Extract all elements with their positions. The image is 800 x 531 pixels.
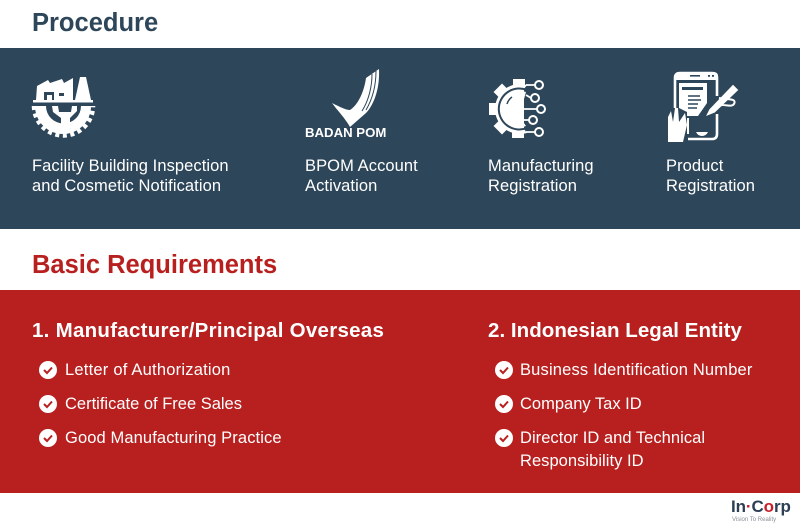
logo: InCorp [731,497,791,523]
icon: tablet with pen and hand [668,72,738,142]
item: certificate of free sales: Certificate of Free Sales [65,395,242,413]
item: letter of authorization: Letter of Authorization [65,361,231,379]
text: tagline: Vision To Reality [732,517,776,523]
item: good manufacturing practice: Good Manufacturing Practice [65,429,282,447]
item: director and technical responsibility id [495,429,705,470]
text: step 4: Product [666,157,723,175]
panel: requirements [0,290,800,493]
text: InCorp wordmark: In·Corp [731,497,791,516]
item: director and technical responsibility id: Responsibility ID [520,452,644,470]
text: step 2 [305,157,418,195]
text: step 1: Facility Building Inspection [32,157,229,175]
text: step 1: and Cosmetic Notification [32,177,221,195]
icon: Badan POM logo [332,69,380,127]
text: step 4 [666,157,755,195]
icon: digital gear [489,79,546,138]
item: business identification number: Business Identification Number [520,361,753,379]
heading: manufacturer: 1. Manufacturer/Principal Overseas [32,319,384,342]
text: step 2: Activation [305,177,377,195]
text: step 3: Manufacturing [488,157,594,175]
heading: Procedure: Procedure [32,9,158,37]
text: Badan POM wordmark: BADAN POM [305,125,386,140]
text: step 4: Registration [666,177,755,195]
icon: factory gear [32,77,96,138]
text: step 3 [488,157,594,195]
item: company tax id: Company Tax ID [520,395,642,413]
item: director and technical responsibility id: Director ID and Technical [520,429,705,447]
checklist: manufacturer [39,361,282,447]
text: step 3: Registration [488,177,577,195]
text: step 2: BPOM Account [305,157,418,175]
checklist: legal entity [495,361,753,470]
panel: procedure steps [0,48,800,229]
heading: Basic Requirements: Basic Requirements [32,251,277,279]
heading: Indonesian legal entity: 2. Indonesian Legal Entity [488,319,742,342]
text: step 1 [32,157,229,195]
